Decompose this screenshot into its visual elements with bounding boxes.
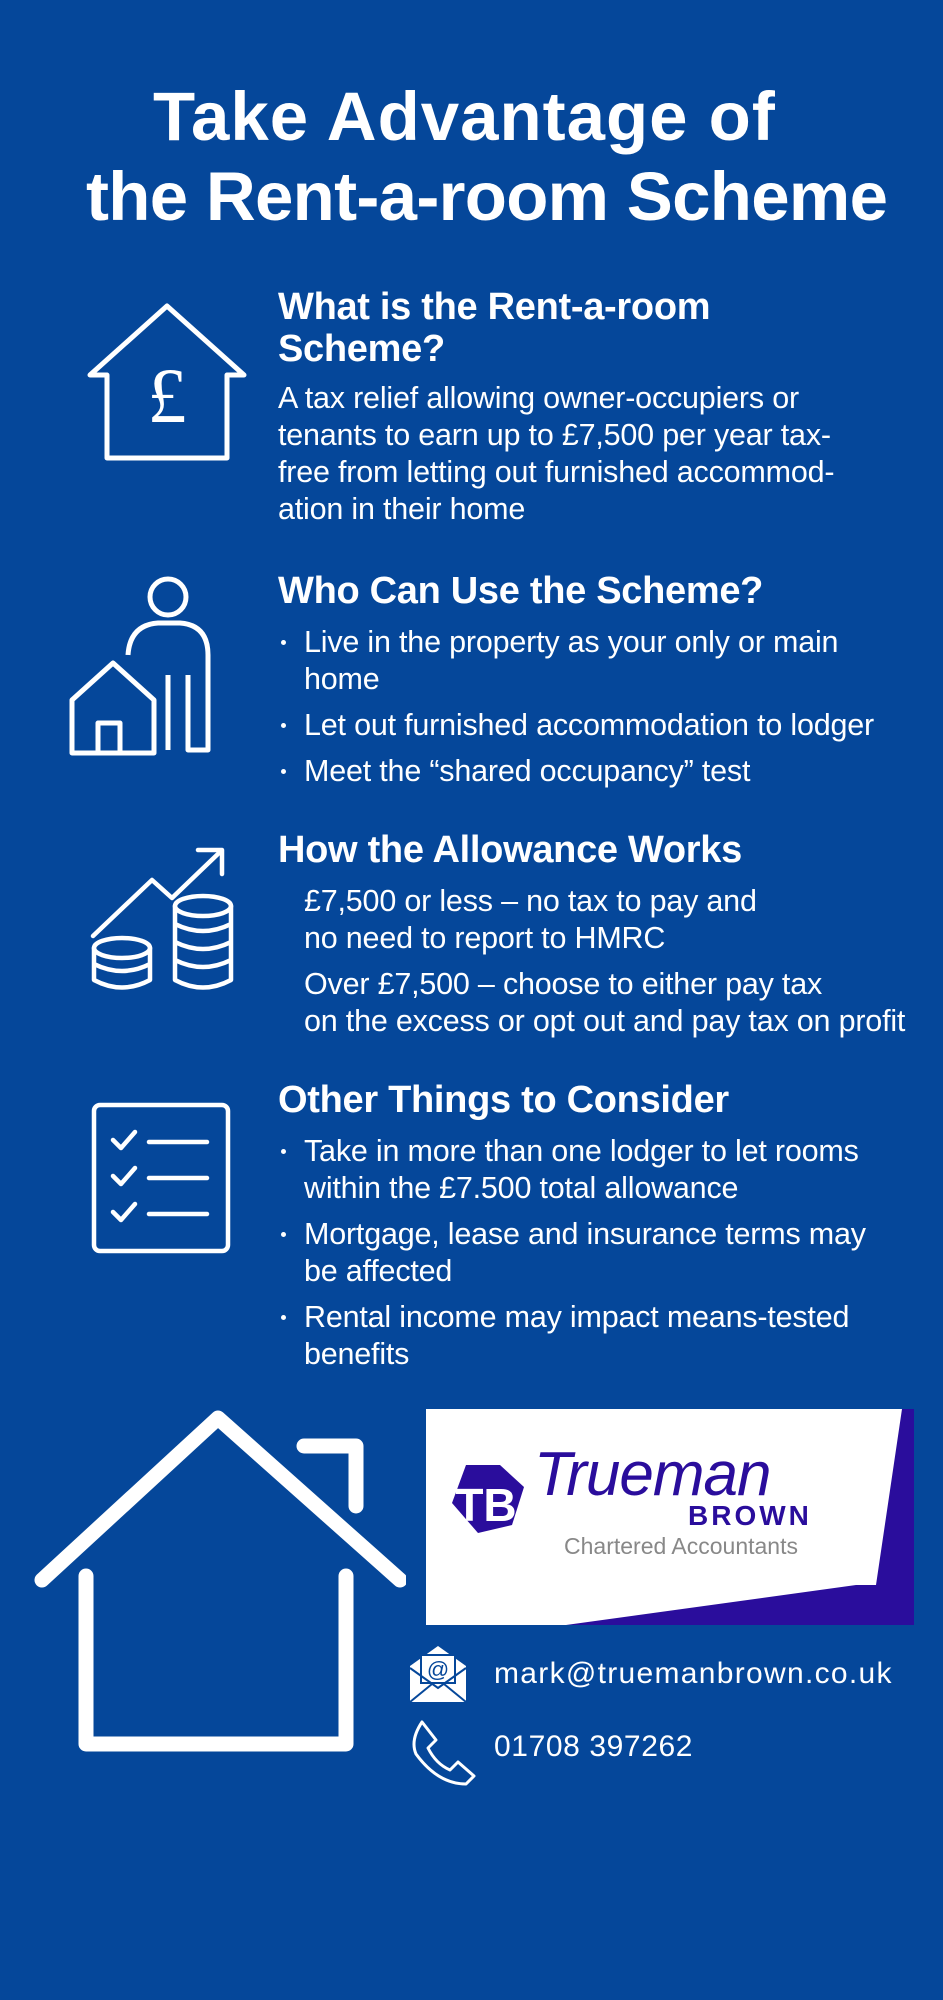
section: other things: Mortgage, lease and insurance terms may: [304, 1217, 866, 1251]
section: allowance: no need to report to HMRC: [304, 921, 665, 955]
section: who can use: Who Can Use the Scheme?: [278, 570, 763, 612]
section: other things: Other Things to Consider: [278, 1079, 729, 1121]
section: what is: ation in their home: [278, 492, 525, 526]
title: Take Advantage of: [153, 78, 776, 155]
section: who can use: Meet the “shared occupancy” test: [304, 754, 750, 788]
icon: house with pound: [88, 303, 246, 460]
icon: email: @: [427, 1657, 449, 1682]
section: allowance: £7,500 or less – no tax to pay and: [304, 884, 757, 918]
section: allowance: [278, 829, 906, 1038]
section: allowance: How the Allowance Works: [278, 829, 742, 871]
section: what is: A tax relief allowing owner-occupiers or: [278, 381, 799, 415]
icon: checklist: [92, 1102, 230, 1254]
section: other things: Rental income may impact means-tested: [304, 1300, 849, 1334]
logo: [426, 1409, 914, 1625]
logo: Trueman: [534, 1440, 770, 1509]
icon: house with pound: £: [148, 352, 186, 439]
section: what is: What is the Rent-a-room: [278, 286, 710, 328]
section: other things: [278, 1079, 866, 1371]
section: allowance: on the excess or opt out and pay tax on profit: [304, 1004, 905, 1038]
section: who can use: home: [304, 662, 380, 696]
section: allowance: Over £7,500 – choose to either pay tax: [304, 967, 822, 1001]
section: who can use: Live in the property as your only or main: [304, 625, 838, 659]
section: what is: free from letting out furnished accommod-: [278, 455, 834, 489]
icon: email: [410, 1646, 466, 1702]
logo mark: [452, 1465, 524, 1533]
section: what is: tenants to earn up to £7,500 per year tax-: [278, 418, 831, 452]
section: other things: benefits: [304, 1337, 409, 1371]
logo: Chartered Accountants: [564, 1533, 798, 1559]
icon: coins and arrow: [90, 848, 234, 990]
section: other things: Take in more than one lodger to let rooms: [304, 1134, 859, 1168]
phone text: 01708 397262: [494, 1730, 693, 1763]
icon: phone: [412, 1720, 476, 1786]
logo: BROWN: [688, 1500, 812, 1531]
section: other things: be affected: [304, 1254, 452, 1288]
section: what is: Scheme?: [278, 328, 445, 370]
section: who can use: Let out furnished accommodation to lodger: [304, 708, 874, 742]
section: who can use: [278, 570, 874, 788]
section: other things: within the £7.500 total allowance: [304, 1171, 738, 1205]
email text: mark@truemanbrown.co.uk: [494, 1657, 893, 1690]
section: what is: [278, 286, 834, 526]
icon: person with house: [70, 576, 210, 756]
logo mark: TB: [455, 1479, 517, 1531]
big house outline: [34, 1410, 406, 1752]
title: [86, 78, 887, 235]
title: the Rent-a-room Scheme: [86, 158, 887, 235]
